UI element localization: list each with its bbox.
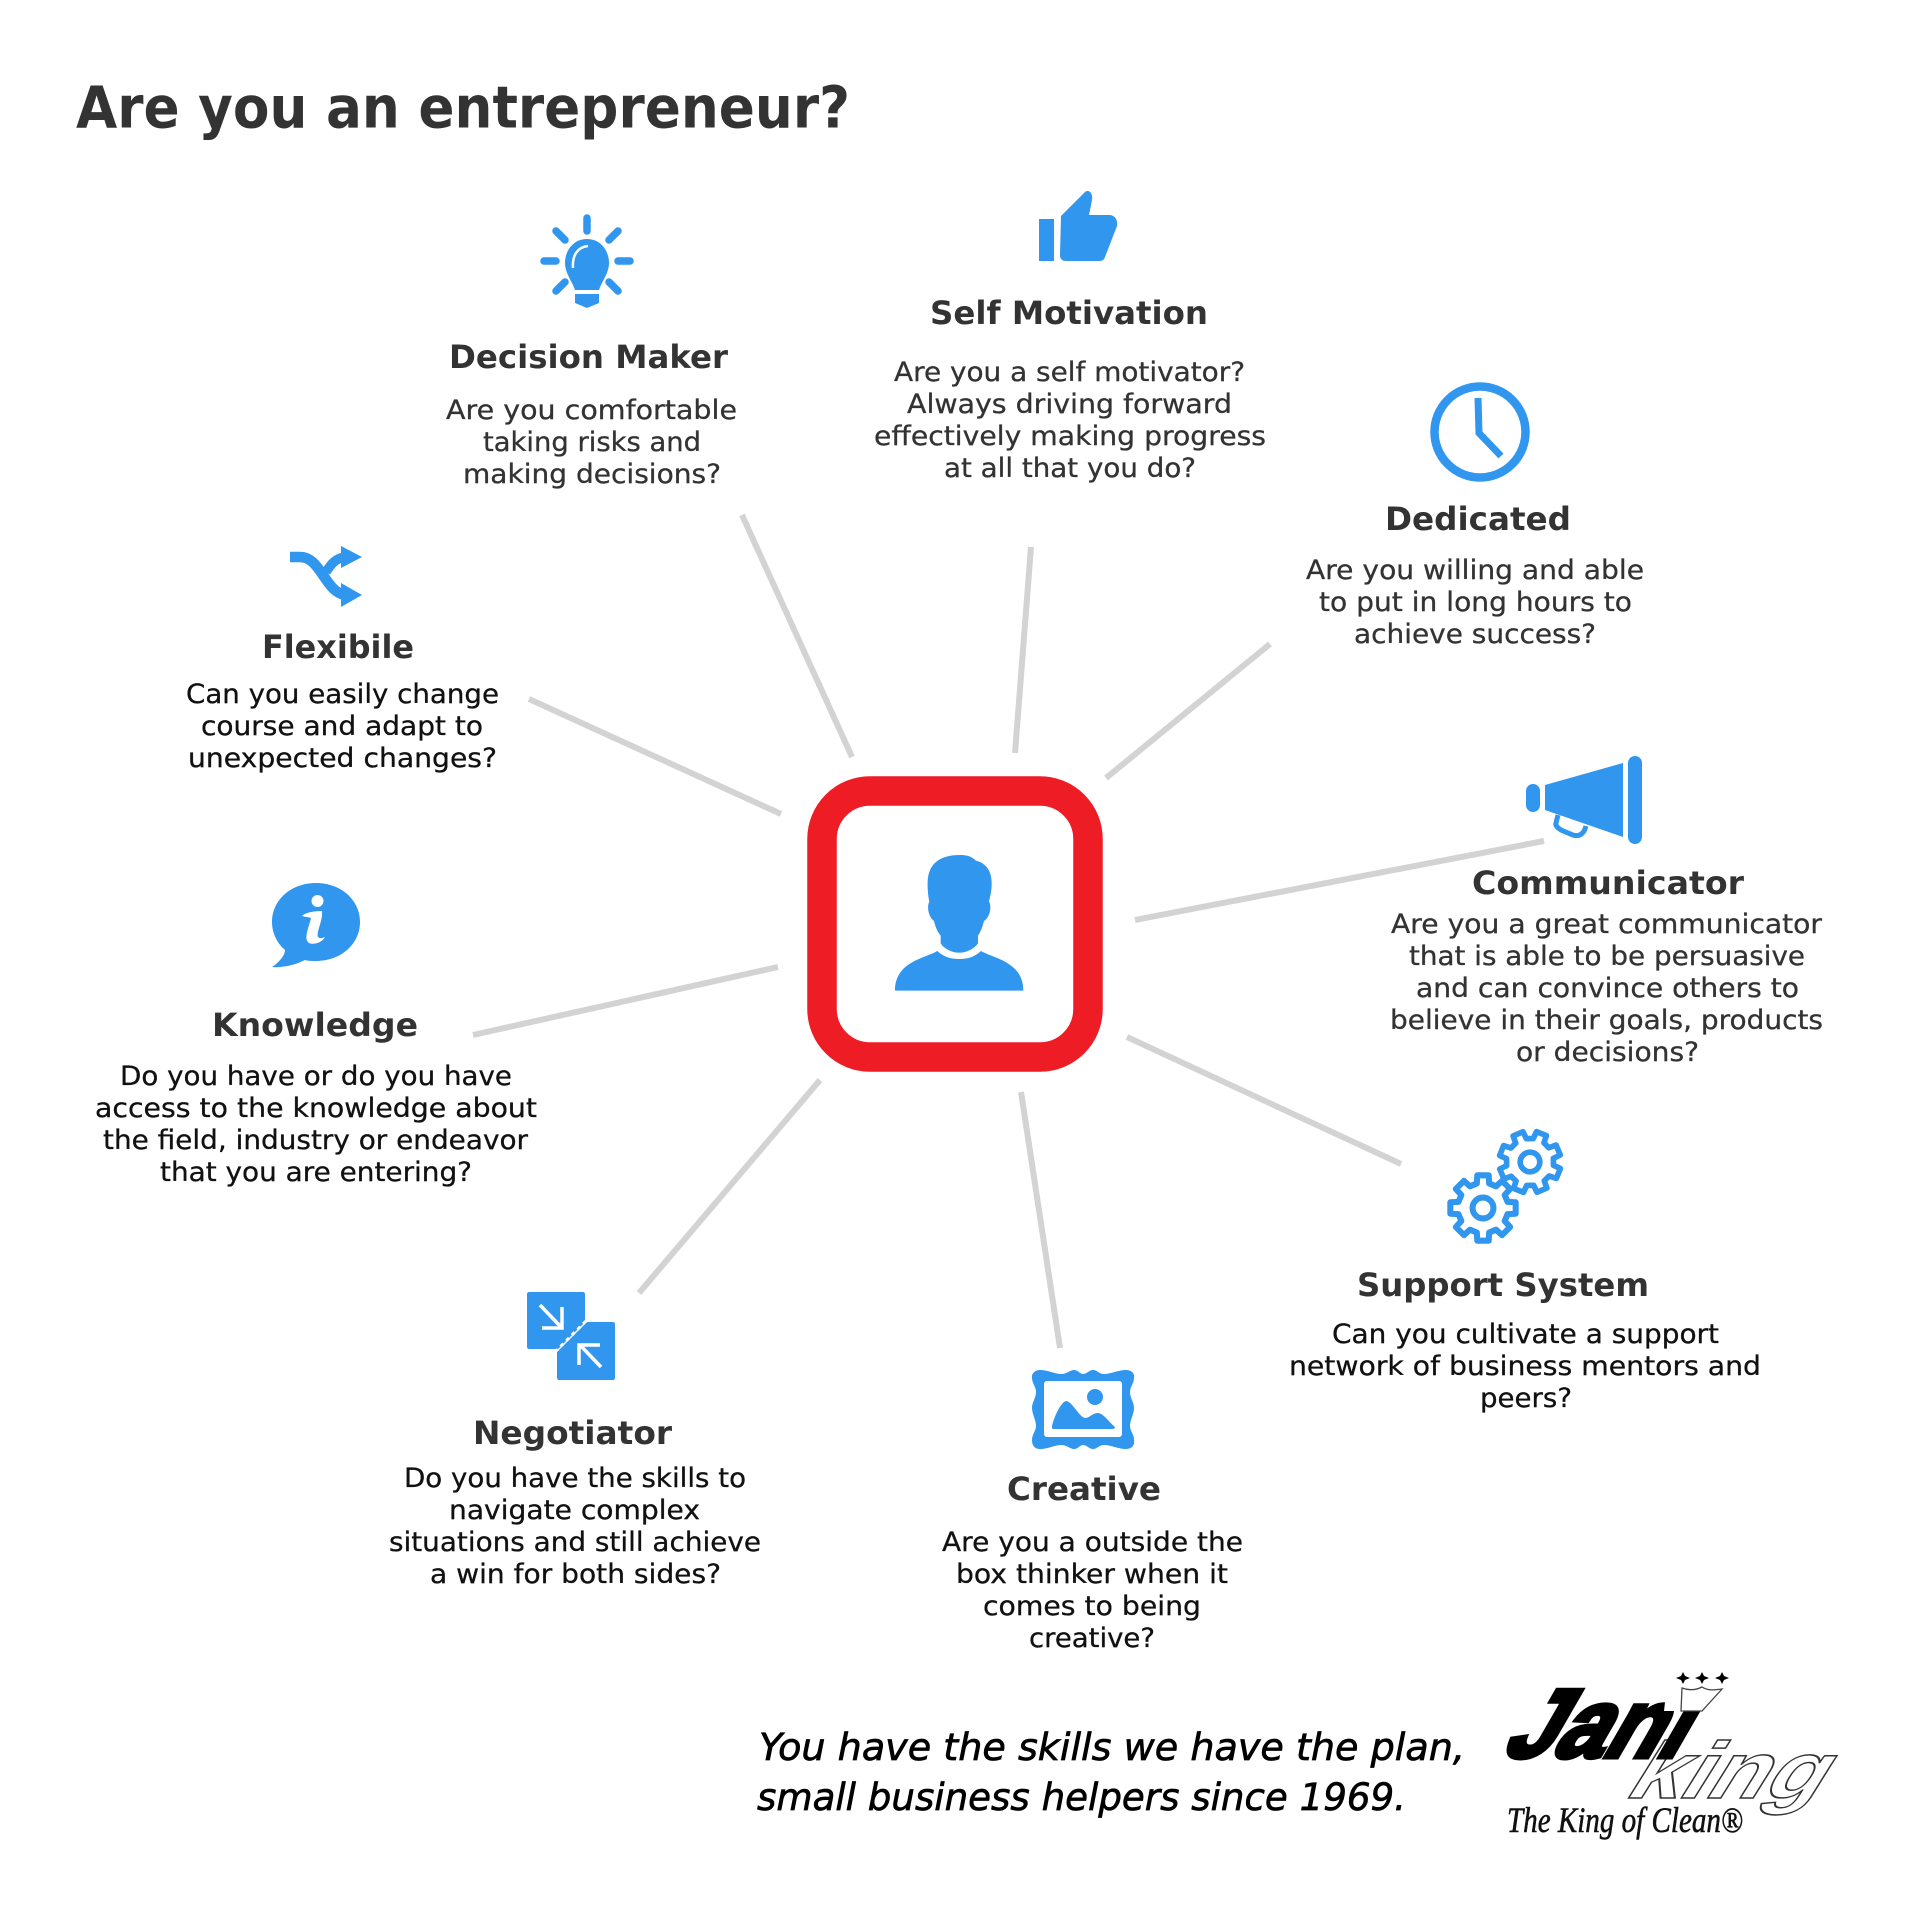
panel: communicator [1390, 756, 1823, 1068]
logo: Jani King [1488, 1670, 1862, 1840]
panel: support system [1289, 1122, 1761, 1414]
description: to put in long hours to [1319, 587, 1632, 618]
heading: Flexibile [262, 628, 414, 666]
icon: negotiation arrows [527, 1292, 615, 1380]
description: Can you cultivate a support [1332, 1319, 1719, 1350]
description: that is able to be persuasive [1409, 941, 1805, 972]
description: the field, industry or endeavor [103, 1125, 528, 1156]
description: Always driving forward [907, 389, 1232, 420]
heading: Knowledge [212, 1006, 418, 1044]
panel: self motivation [874, 191, 1266, 484]
description [446, 395, 737, 490]
description: Are you a self motivator? [894, 357, 1245, 388]
description: a win for both sides? [430, 1559, 721, 1590]
heading: Creative [1007, 1470, 1161, 1508]
description: Can you easily change [186, 679, 499, 710]
icon: clock [1434, 386, 1526, 478]
description: or decisions? [1516, 1037, 1699, 1068]
icon: thumbs up [1039, 191, 1117, 261]
description: box thinker when it [956, 1559, 1228, 1590]
description: Are you a great communicator [1391, 909, 1822, 940]
icon: picture frame [1032, 1370, 1134, 1449]
description: achieve success? [1354, 619, 1596, 650]
description: peers? [1480, 1383, 1572, 1414]
tagline [757, 1726, 1465, 1819]
description [1390, 909, 1823, 1068]
logo crown [1664, 1672, 1734, 1711]
tagline: You have the skills we have the plan, [759, 1726, 1465, 1769]
description: making decisions? [463, 459, 721, 490]
tagline: small business helpers since 1969. [757, 1776, 1406, 1819]
panel: negotiator [389, 1292, 761, 1590]
description: Are you willing and able [1306, 555, 1644, 586]
logo word: king: king [1611, 1726, 1862, 1815]
heading: Dedicated [1385, 500, 1571, 538]
description: and can convince others to [1416, 973, 1799, 1004]
description: course and adapt to [201, 711, 483, 742]
title: Are you an entrepreneur? [76, 74, 850, 142]
description: at all that you do? [944, 453, 1196, 484]
description: effectively making progress [874, 421, 1266, 452]
panel: dedicated [1306, 386, 1644, 650]
central red rounded square with person icon [822, 791, 1088, 1057]
icon: megaphone [1526, 756, 1642, 844]
icon: person [895, 855, 1023, 991]
description: navigate complex [449, 1495, 700, 1526]
description: comes to being [983, 1591, 1201, 1622]
panel: decision maker [446, 218, 737, 490]
panel: knowledge [95, 883, 537, 1188]
description [95, 1061, 537, 1188]
description: taking risks and [483, 427, 701, 458]
description: believe in their goals, products [1390, 1005, 1823, 1036]
description: Are you a outside the [942, 1527, 1243, 1558]
description: access to the knowledge about [95, 1093, 537, 1124]
description: Do you have or do you have [120, 1061, 512, 1092]
description [1306, 555, 1644, 650]
description [186, 679, 499, 774]
logo slogan: The King of Clean® [1507, 1800, 1743, 1840]
panel: creative [942, 1370, 1243, 1654]
description: that you are entering? [160, 1157, 472, 1188]
heading: Support System [1357, 1266, 1649, 1304]
heading: Self Motivation [930, 294, 1208, 332]
description: unexpected changes? [188, 743, 497, 774]
icon: info speech bubble [272, 883, 360, 967]
heading: Negotiator [473, 1414, 672, 1452]
heading: Decision Maker [449, 338, 728, 376]
panel: flexibile [186, 546, 499, 774]
description [942, 1527, 1243, 1654]
connector lines [473, 515, 1544, 1348]
icon: shuffle arrows [290, 546, 362, 607]
description [1289, 1319, 1761, 1414]
heading: Communicator [1472, 864, 1744, 902]
description: network of business mentors and [1289, 1351, 1761, 1382]
description: creative? [1029, 1623, 1155, 1654]
icon: light bulb [544, 218, 630, 308]
icon: gears [1450, 1122, 1570, 1241]
description: situations and still achieve [389, 1527, 761, 1558]
description: Do you have the skills to [404, 1463, 746, 1494]
description [389, 1463, 761, 1590]
description [874, 357, 1266, 484]
description: Are you comfortable [446, 395, 737, 426]
logo word: Jani: Jani [1488, 1670, 1728, 1778]
